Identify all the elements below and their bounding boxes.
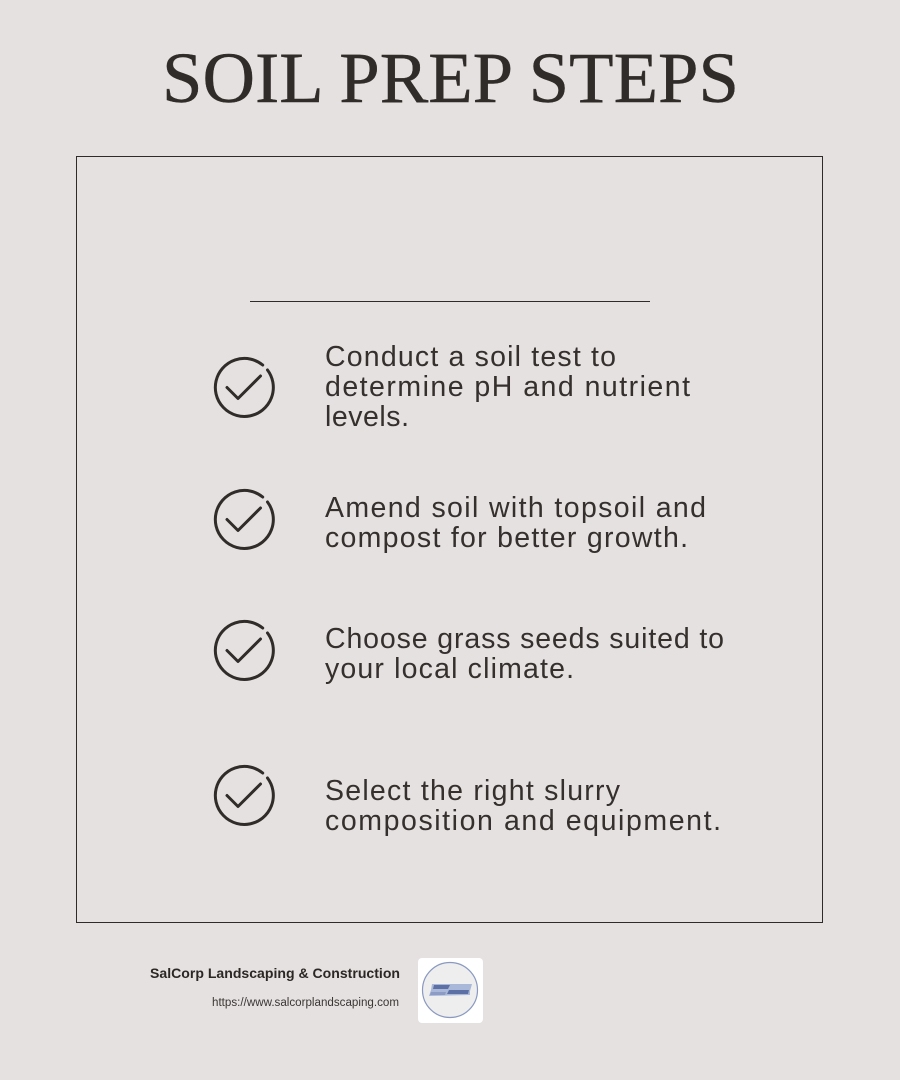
text: step 2: Amend soil with topsoil and xyxy=(325,492,706,524)
icon: check circle 4 xyxy=(215,766,273,824)
text: step 1 xyxy=(325,341,690,433)
text: step 4: composition and equipment. xyxy=(325,805,721,837)
text: step 2: compost for better growth. xyxy=(325,522,688,554)
text: step 3 xyxy=(325,623,724,685)
text: step 3: Choose grass seeds suited to xyxy=(325,623,724,655)
icon: company logo xyxy=(418,958,483,1023)
text: company name: SalCorp Landscaping & Construction xyxy=(150,965,400,981)
icon: check circle 1 xyxy=(215,358,273,416)
title: SOIL PREP STEPS xyxy=(162,38,739,118)
panel: steps frame xyxy=(76,156,822,922)
text: step 3: your local climate. xyxy=(325,653,574,685)
icon: check circle 3 xyxy=(215,621,273,679)
text: website: https://www.salcorplandscaping.com xyxy=(212,997,399,1009)
icon: check circle 2 xyxy=(215,490,273,548)
text: step 1: Conduct a soil test to xyxy=(325,341,616,373)
text: step 1: determine pH and nutrient xyxy=(325,371,690,403)
text: step 1: levels. xyxy=(325,401,409,433)
text: step 4 xyxy=(325,775,721,837)
text: step 4: Select the right slurry xyxy=(325,775,621,807)
text: step 2 xyxy=(325,492,706,554)
